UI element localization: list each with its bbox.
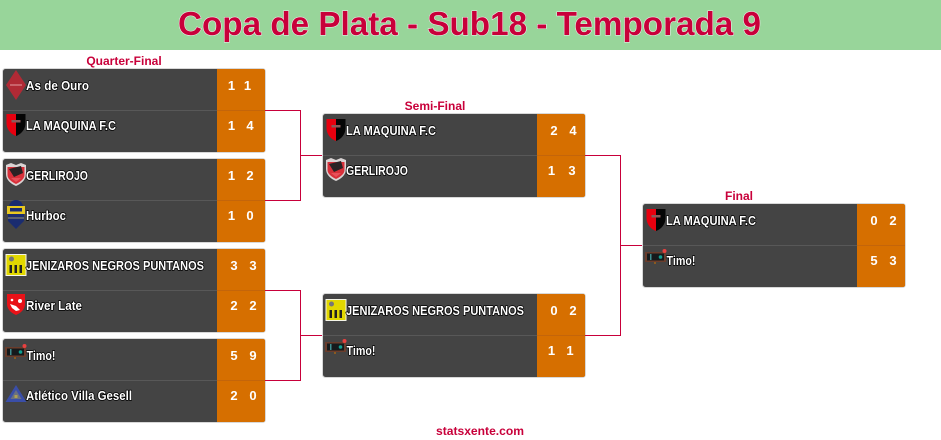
team: La Maquina <box>646 209 897 231</box>
team: Atletico Villa Gesell: Atlético Villa Gesell <box>26 389 132 403</box>
match: final <box>642 204 906 288</box>
match: Jenizaros vs River Late <box>2 248 266 332</box>
team: River Late: 2 <box>230 298 238 313</box>
team: As de Ouro: 1 <box>244 78 251 93</box>
heading: final: Final <box>725 189 753 203</box>
team: As de Ouro: 1 <box>228 78 235 93</box>
match: As de Ouro vs La Maquina <box>2 68 266 152</box>
team: Hurboc: 0 <box>246 208 254 223</box>
team: Jenizaros Negros Puntanos: 3 <box>249 258 257 273</box>
team: Gerlirojo: 1 <box>228 168 235 183</box>
team: Timo: 5 <box>230 348 238 363</box>
team: As de Ouro: As de Ouro <box>26 79 89 93</box>
heading: semi-final: Semi-Final <box>405 99 465 113</box>
title banner <box>0 0 941 50</box>
team: Timo: 1 <box>548 343 555 358</box>
team: La Maquina: LA MAQUINA F.C <box>666 214 756 228</box>
team: Timo <box>645 249 897 268</box>
team: Jenizaros Negros Puntanos: 2 <box>569 303 577 318</box>
team: Timo: 1 <box>566 343 574 358</box>
team: Gerlirojo: 3 <box>568 163 576 178</box>
match: semi-final 1 <box>322 114 586 198</box>
team: Atletico Villa Gesell <box>6 385 257 403</box>
team: Timo: 3 <box>889 253 897 268</box>
team: La Maquina: 2 <box>550 123 558 138</box>
team: Hurboc: 1 <box>228 208 235 223</box>
team: Jenizaros Negros Puntanos <box>6 254 257 276</box>
team: Gerlirojo <box>326 158 576 181</box>
team: As de Ouro <box>6 70 251 100</box>
team: Hurboc <box>7 200 254 229</box>
team: La Maquina: 0 <box>870 213 878 228</box>
team: La Maquina: 4 <box>569 123 577 138</box>
team: Gerlirojo: 1 <box>548 163 555 178</box>
team: Jenizaros Negros Puntanos <box>326 299 577 321</box>
team: Jenizaros Negros Puntanos: JENIZAROS NEGROS PUNTANOS <box>346 304 524 318</box>
match: Timo vs Atletico Villa Gesell <box>2 338 266 422</box>
team: La Maquina: 1 <box>228 118 235 133</box>
team: La Maquina <box>326 119 577 141</box>
heading: quarter-final: Quarter-Final <box>86 54 162 68</box>
match: semi-final 2 <box>322 294 586 378</box>
team: Timo: 5 <box>870 253 878 268</box>
team: River Late <box>7 294 257 315</box>
connector: quarter-finals to semi-final 2 <box>265 290 322 380</box>
title: Copa de Plata - Sub18 - Temporada 9 <box>178 5 761 42</box>
match: Gerlirojo vs Hurboc <box>2 158 266 242</box>
footer credit: statsxente.com <box>436 424 524 438</box>
team: Jenizaros Negros Puntanos: 3 <box>230 258 238 273</box>
team: Timo: Timo! <box>346 344 376 358</box>
team: La Maquina: 4 <box>246 118 254 133</box>
team: Timo <box>325 339 574 358</box>
team: Jenizaros Negros Puntanos: 0 <box>550 303 558 318</box>
team: Timo: 9 <box>249 348 257 363</box>
team: Timo: Timo! <box>26 349 56 363</box>
team: Timo <box>5 344 257 363</box>
team: Timo: Timo! <box>666 254 696 268</box>
team: River Late: 2 <box>249 298 257 313</box>
team: Atletico Villa Gesell: 2 <box>230 388 238 403</box>
team: Gerlirojo: GERLIROJO <box>26 169 88 183</box>
team: Atletico Villa Gesell: 0 <box>249 388 257 403</box>
team: La Maquina: LA MAQUINA F.C <box>26 119 116 133</box>
connector: semi-finals to final <box>585 156 642 336</box>
team: Hurboc: Hurboc <box>26 209 66 223</box>
connector: quarter-finals to semi-final 1 <box>265 110 322 200</box>
team: La Maquina <box>6 114 254 136</box>
team: Gerlirojo: 2 <box>246 168 254 183</box>
team: River Late: River Late <box>26 299 82 313</box>
team: La Maquina: 2 <box>889 213 897 228</box>
team: La Maquina: LA MAQUINA F.C <box>346 124 436 138</box>
team: Gerlirojo <box>6 163 254 186</box>
team: Jenizaros Negros Puntanos: JENIZAROS NEGROS PUNTANOS <box>26 259 204 273</box>
team: Gerlirojo: GERLIROJO <box>346 164 408 178</box>
